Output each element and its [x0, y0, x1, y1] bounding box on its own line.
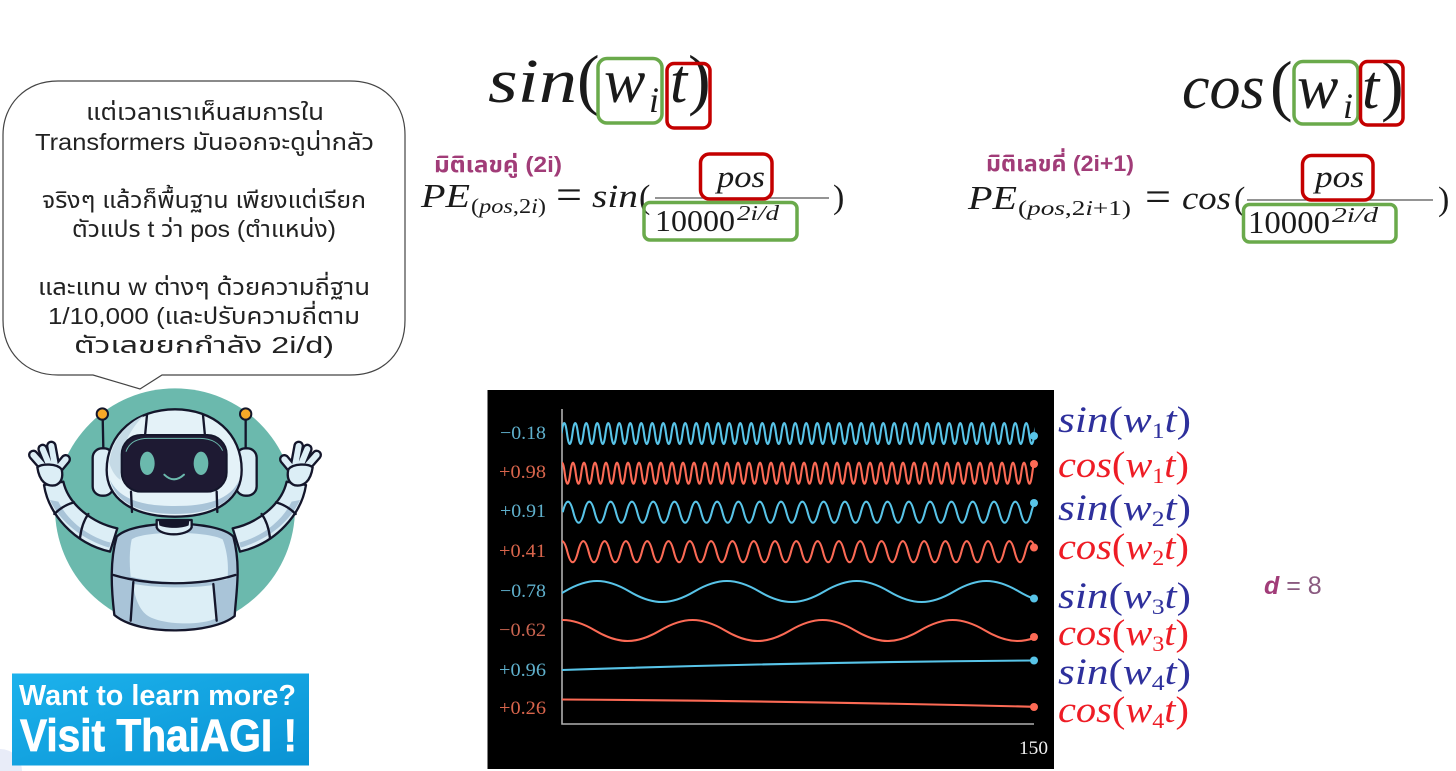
cos w2	[557, 541, 1057, 562]
end dots	[1030, 432, 1038, 711]
x-axis label: 150	[1019, 738, 1048, 759]
legend: cos w4: cos(w	[1058, 690, 1150, 731]
formula: sin(w_i t): )	[688, 41, 711, 117]
legend: cos w2: cos(w	[1058, 527, 1150, 568]
legend: sin w1: t	[1165, 400, 1179, 441]
cos w1	[559, 463, 1082, 484]
antennas	[97, 408, 251, 448]
bubble text	[35, 99, 374, 358]
chart panel: sinusoid waves	[488, 390, 1095, 769]
formula: cos(w_i t)	[1182, 47, 1404, 126]
legend: sin w1: 1	[1152, 418, 1165, 443]
series legend	[1058, 400, 1191, 733]
formula: PE odd: )	[1438, 181, 1449, 218]
value labels: +0.26	[499, 698, 546, 719]
value labels: −0.18	[500, 423, 546, 444]
legend: sin w3: sin(w	[1058, 576, 1148, 617]
bubble text: ตัวเลขยกกำลัง 2i/d)	[74, 332, 334, 358]
red box: pos	[1302, 156, 1373, 200]
formula: sin(w_i t): t	[670, 48, 689, 116]
value labels: +0.98	[499, 462, 546, 483]
formula: sin(w_i t): i	[649, 80, 659, 120]
sin w4	[562, 660, 1034, 670]
legend: cos w3: cos(w	[1058, 613, 1150, 654]
banner text line 2: Visit ThaiAGI !	[20, 710, 297, 761]
legend: sin w3: 3	[1152, 594, 1165, 619]
formula: sin(w_i t): w	[604, 48, 645, 116]
bubble outline	[3, 81, 405, 389]
formula: PE even: sin	[592, 179, 638, 215]
formula: PE even: pos	[715, 159, 765, 194]
cos w3	[530, 620, 1050, 641]
sin w2	[563, 502, 1063, 523]
legend: sin w2: )	[1177, 488, 1191, 529]
bubble text: แต่เวลาเราเห็นสมการใน	[86, 99, 324, 125]
value labels: +0.96	[499, 660, 546, 681]
legend: sin w4: sin(w	[1058, 652, 1148, 693]
formula: sin(w_i t)	[488, 41, 711, 120]
axes	[562, 409, 1034, 724]
legend: cos w4: )	[1176, 690, 1189, 731]
call to action banner	[12, 674, 309, 766]
value labels: −0.78	[500, 581, 546, 602]
visor	[122, 435, 227, 492]
panel: sine formula (even dimensions)	[420, 41, 844, 240]
bubble text: และแทน w ต่างๆ ด้วยความถี่ฐาน	[38, 271, 370, 300]
legend: sin w3: t	[1165, 576, 1179, 617]
legend: cos w4: 4	[1152, 708, 1164, 733]
bubble text: ตัวแปร t ว่า pos (ตำแหน่ง)	[72, 216, 336, 242]
formula: cos(w_i t): i	[1343, 86, 1353, 126]
legend: sin w4: t	[1165, 652, 1179, 693]
sin w1	[562, 423, 1095, 444]
eyes	[140, 452, 155, 475]
formula: PE even	[420, 159, 844, 238]
legend: sin w2: sin(w	[1058, 488, 1148, 529]
formula: PE odd: pos	[1313, 159, 1364, 194]
cos w4	[562, 700, 1034, 707]
legend: cos w1: cos(w	[1058, 445, 1150, 486]
red box: t	[1360, 62, 1403, 125]
formula: PE even: =	[556, 173, 582, 219]
green box: 10000^(2i/d)	[1244, 204, 1396, 242]
body	[112, 520, 238, 630]
legend: cos w4: t	[1164, 690, 1177, 731]
bubble text: จริงๆ แล้วก็พื้นฐาน เพียงแต่เรียก	[42, 184, 366, 213]
formula: cos(w_i t): w	[1297, 54, 1338, 122]
formula: PE odd: cos	[1182, 181, 1231, 217]
value labels: −0.62	[499, 620, 546, 641]
formula: cos(w_i t): t	[1362, 54, 1381, 122]
formula: PE odd: 2i/d	[1332, 203, 1379, 227]
formula: cos(w_i t): cos	[1182, 54, 1265, 122]
icon: robot mascot	[33, 388, 317, 630]
formula: PE even: )	[833, 179, 844, 216]
speech bubble	[3, 81, 405, 389]
legend: cos w2: t	[1164, 527, 1177, 568]
wave curves	[562, 422, 1034, 708]
formula: PE even: (pos,2i)	[471, 194, 546, 218]
formula: PE odd: 10000	[1248, 204, 1330, 240]
panel: cosine formula (odd dimensions)	[967, 47, 1449, 242]
legend: cos w3: )	[1176, 613, 1189, 654]
formula: PE even: PE	[420, 178, 470, 215]
legend: cos w1: )	[1176, 445, 1189, 486]
label: even dimension: มิติเลขคู่ (2i)	[434, 152, 562, 178]
legend: sin w1: )	[1177, 400, 1191, 441]
label: d = 8: d = 8	[1264, 572, 1322, 600]
formula: PE even: 2i/d	[737, 201, 780, 225]
right arm and hand	[233, 446, 317, 552]
bubble text: 1/10,000 (และปรับความถี่ตาม	[48, 300, 360, 329]
green box: 10000^(2i/d)	[644, 202, 797, 240]
smile	[164, 475, 184, 479]
formula: PE odd	[967, 159, 1449, 240]
legend: sin w2: 2	[1152, 506, 1165, 531]
head	[107, 409, 242, 517]
sin w3	[562, 580, 1031, 603]
formula: cos(w_i t): )	[1381, 47, 1404, 123]
value labels: +0.41	[499, 541, 546, 562]
red box: t	[667, 64, 710, 128]
formula: PE odd: PE	[967, 180, 1017, 217]
green box: w_i	[598, 58, 662, 123]
left arm and hand	[33, 446, 117, 552]
formula: PE odd: (	[1234, 181, 1245, 218]
ears	[93, 448, 257, 496]
teal circle	[55, 388, 295, 628]
bubble text: Transformers มันออกจะดูน่ากลัว	[35, 129, 374, 157]
legend: sin w2: t	[1165, 488, 1179, 529]
value labels	[499, 423, 546, 719]
formula: sin(w_i t): sin	[488, 48, 577, 116]
red box: pos	[700, 154, 772, 199]
legend: cos w1: t	[1164, 445, 1177, 486]
green box: w_i	[1294, 62, 1358, 124]
corner decoration	[0, 749, 22, 771]
banner text line 1: Want to learn more?	[19, 680, 296, 712]
black background	[488, 390, 1054, 769]
legend: cos w3: 3	[1152, 631, 1164, 656]
legend: cos w2: )	[1176, 527, 1189, 568]
formula: PE odd: =	[1145, 175, 1171, 221]
value labels: +0.91	[500, 501, 546, 522]
label: odd dimension: มิติเลขคี่ (2i+1)	[986, 148, 1134, 176]
legend: cos w2: 2	[1152, 545, 1164, 570]
legend: cos w3: t	[1164, 613, 1177, 654]
legend: sin w3: )	[1177, 576, 1191, 617]
legend: cos w1: 1	[1152, 463, 1164, 488]
formula: cos(w_i t): (	[1270, 47, 1293, 123]
legend: sin w1: sin(w	[1058, 400, 1148, 441]
formula: PE even: 10000	[655, 203, 735, 238]
legend: sin w4: 4	[1152, 670, 1165, 695]
formula: sin(w_i t): (	[577, 41, 600, 117]
legend: sin w4: )	[1177, 652, 1191, 693]
formula: PE odd: (pos ,2i+1)	[1018, 196, 1131, 220]
formula: PE even: (	[639, 179, 650, 216]
